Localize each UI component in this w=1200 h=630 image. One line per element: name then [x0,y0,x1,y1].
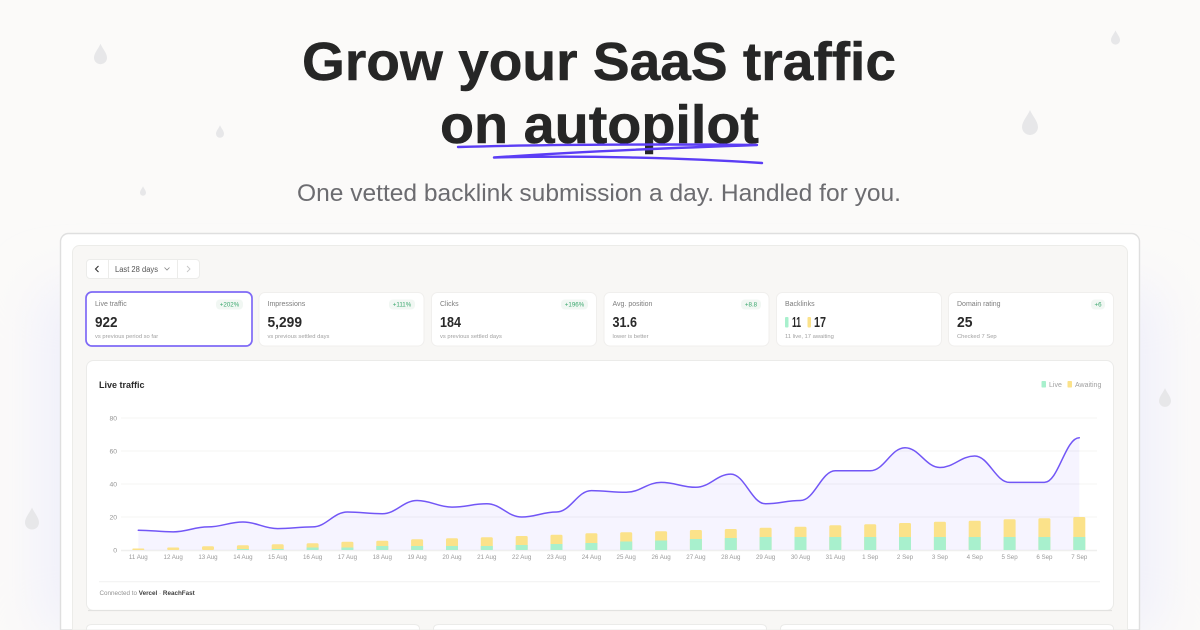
y axis labels: 60 [109,448,117,456]
chart legend: Awaiting [1075,382,1101,389]
panel: live traffic chart [86,360,1114,610]
x axis date labels: 18 Aug [373,554,392,561]
date range picker [86,260,200,278]
metric card: clicks [432,292,596,346]
x axis date labels: 31 Aug [826,554,845,561]
x axis date labels: 19 Aug [407,554,427,561]
metric card: clicks: vs previous settled days [440,334,502,340]
panel: dashboard window [60,234,1140,630]
panel: bottom middle card [434,624,766,630]
connected sources footer: Connected to Vercel · ReachFast [100,590,196,597]
x axis date labels: 5 Sep [1002,554,1018,561]
metric card: clicks: +196% [565,302,585,308]
title [302,32,896,155]
metric card: domain rating: +6 [1094,302,1102,308]
metric card: clicks: Clicks [440,301,459,308]
metric card: impressions: +111% [393,302,412,308]
subtitle: One vetted backlink submission a day. Handled for you. [297,180,901,207]
metric card: average position: +8.8 [745,302,758,308]
metric card: domain rating [948,292,1114,346]
x axis date labels: 17 Aug [338,554,358,561]
chart heading: Live traffic [99,380,145,390]
chart legend: Live [1049,382,1062,389]
x axis date labels: 21 Aug [477,554,497,561]
y axis labels: 80 [109,416,117,422]
metric card: impressions: 5,299 [268,314,302,331]
metric card: average position: 31.6 [612,314,637,331]
metric card: average position: Avg. position [612,301,653,308]
x axis date labels: 7 Sep [1071,554,1088,561]
metric card: average position: lower is better [612,334,649,340]
x axis date labels: 27 Aug [686,554,706,561]
x axis date labels: 1 Sep [862,554,879,561]
y axis labels: 20 [109,514,117,522]
metric card: backlinks: Backlinks [785,301,815,308]
x axis date labels: 2 Sep [897,554,914,561]
y axis labels: 40 [109,482,117,488]
traffic line [138,438,1079,532]
metric card: impressions: vs previous settled days [268,334,329,340]
x axis date labels: 22 Aug [512,554,532,561]
panel: bottom left card [86,624,420,630]
x axis date labels: 25 Aug [617,554,636,561]
metric card: impressions: Impressions [268,301,306,308]
y axis labels [109,416,117,554]
x axis date labels: 15 Aug [268,554,288,561]
metric card: live traffic [86,292,252,346]
metric card: live traffic: +202% [220,302,240,308]
metric card: backlinks: 17 [814,314,826,331]
title: Grow your SaaS traffic [302,32,896,92]
metric card: backlinks [776,292,942,346]
x axis date labels: 11 Aug [129,554,148,561]
metric card: average position [604,292,769,346]
panel: bottom right card [780,624,1114,630]
x axis date labels [129,554,1088,561]
stacked bars: awaiting [132,517,1085,550]
x axis date labels: 14 Aug [233,554,253,561]
hand-drawn underline [458,145,762,163]
x axis date labels: 29 Aug [756,554,776,561]
metric card: live traffic: 922 [95,314,118,331]
x axis date labels: 24 Aug [582,554,602,561]
x axis date labels: 16 Aug [303,554,323,561]
metric card: live traffic: Live traffic [95,301,127,308]
chart legend [1042,381,1101,389]
metric card: domain rating: 25 [957,314,972,331]
metric card: domain rating: Domain rating [957,301,1001,308]
metric card: domain rating: Checked 7 Sep [957,334,997,340]
metric card: backlinks: 11 [792,314,801,331]
traffic area fill [138,438,1079,550]
metric card: clicks: 184 [440,314,462,331]
metric card: live traffic: vs previous period so far [95,334,158,340]
metric card: impressions [259,292,424,346]
x axis date labels: 13 Aug [198,554,218,561]
decorative water drops [25,30,1171,530]
title: on autopilot [440,95,759,155]
x axis date labels: 23 Aug [547,554,567,561]
x axis date labels: 12 Aug [164,554,183,561]
x axis date labels: 3 Sep [932,554,949,561]
date range picker: Last 28 days [115,265,158,274]
x axis date labels: 6 Sep [1036,554,1053,561]
x axis date labels: 20 Aug [442,554,462,561]
metric card: backlinks: 11 live, 17 awaiting [785,334,834,340]
x axis date labels: 4 Sep [967,554,983,561]
x axis date labels: 30 Aug [791,554,811,561]
x axis date labels: 28 Aug [721,554,741,561]
stacked bars: live [237,537,1085,550]
y axis labels: 0 [113,548,117,554]
x axis date labels: 26 Aug [651,554,671,561]
